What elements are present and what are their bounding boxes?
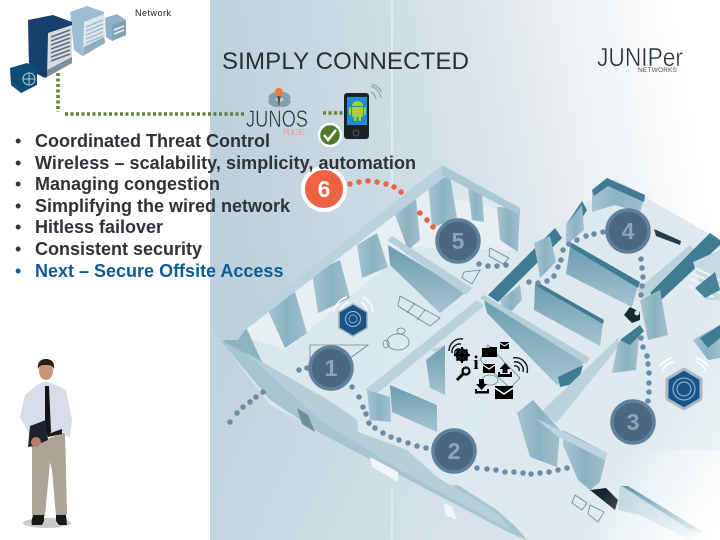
icon: envelope [483, 364, 495, 373]
node 5 [437, 220, 479, 262]
icon: info: i [473, 353, 479, 374]
icon: big envelope [495, 386, 513, 399]
icon: small envelope [500, 342, 509, 349]
network equipment icons [10, 6, 126, 93]
bullet 5: • [15, 217, 21, 237]
bullet 2: • [15, 153, 21, 173]
node 6 [303, 168, 345, 210]
back room walls [534, 178, 681, 346]
node 3 [612, 401, 654, 443]
icon: dark chassis [28, 15, 72, 78]
node 2 [433, 430, 475, 472]
node 4: 4 [622, 218, 635, 244]
node 4 [607, 210, 649, 252]
bullet 2: Wireless – scalability, simplicity, automation [35, 153, 416, 173]
green dotted connection lines [58, 73, 345, 114]
bullet 3: • [15, 174, 21, 194]
icon: folder [482, 347, 497, 357]
stub walls under diagonal [367, 345, 445, 432]
node 5: 5 [452, 228, 465, 254]
lower corner wall [517, 400, 705, 540]
floor [222, 168, 720, 540]
shoes [32, 515, 67, 525]
bullet 4: Simplifying the wired network [35, 196, 291, 216]
node 6: 6 [318, 176, 330, 202]
tie [45, 386, 51, 436]
juniper networks logo: JUNIPer [597, 42, 683, 72]
bullet 6: • [15, 239, 21, 259]
hair [38, 359, 54, 369]
hand [31, 437, 41, 447]
icon: dark small router [10, 63, 37, 93]
icon: wifi right [513, 358, 527, 373]
junos pulse logo: JUNOS [246, 106, 308, 133]
bullet 1: Coordinated Threat Control [35, 131, 270, 151]
bottom-right fade [600, 450, 720, 540]
furniture outlines [310, 248, 604, 522]
icon: light chassis [70, 6, 105, 56]
node 2: 2 [448, 438, 460, 464]
long diagonal inner wall [365, 228, 562, 395]
bullet 4: • [15, 196, 21, 216]
man in business attire [20, 359, 72, 528]
floor plan building [220, 165, 720, 540]
node 1: 1 [325, 355, 338, 381]
junos pulse logo [246, 88, 308, 137]
title: SIMPLY CONNECTED [222, 48, 469, 75]
piers on top-left wall [222, 176, 520, 362]
juniper networks logo: NETWORKS [638, 67, 678, 74]
dotted path: orange link 6 to 5 [350, 181, 433, 227]
head [39, 362, 53, 380]
icon cluster: services [449, 339, 527, 399]
network label: Network [135, 8, 172, 18]
android phone icon [344, 84, 382, 139]
icon: wifi left [449, 339, 463, 354]
shirt [20, 381, 72, 440]
trousers [32, 432, 67, 516]
icon: upload [498, 363, 512, 377]
bullet 7: Next – Secure Offsite Access [35, 261, 283, 281]
bullet 7: • [15, 261, 21, 281]
middle cross wall [480, 295, 590, 387]
bullet 1: • [15, 131, 21, 151]
junos pulse logo: PULSE [283, 128, 305, 137]
bullet 3: Managing congestion [35, 174, 220, 194]
icon: download [475, 379, 489, 394]
icon: search [457, 368, 470, 380]
windows in top-left wall [240, 190, 520, 350]
top-right room wall cap [442, 165, 520, 214]
lower-left wall [220, 340, 527, 540]
green check badge [319, 124, 341, 146]
access point 2 [660, 358, 708, 409]
access point 1 [334, 297, 373, 336]
bullet list [15, 131, 416, 281]
dotted path: blue ring through nodes [230, 232, 649, 474]
icon: flame [267, 88, 292, 109]
icon: light switch box [105, 14, 126, 41]
large inner wall [388, 245, 466, 313]
bullet 5: Hitless failover [35, 217, 163, 237]
top-left wall cap [220, 165, 446, 340]
folder [28, 420, 48, 447]
right diagonal wall [535, 233, 720, 422]
android robot [349, 101, 366, 121]
node 1 [310, 347, 352, 389]
belt [48, 429, 62, 437]
icon: gear [454, 347, 470, 363]
bullet 6: Consistent security [35, 239, 202, 259]
node 3: 3 [627, 409, 639, 435]
